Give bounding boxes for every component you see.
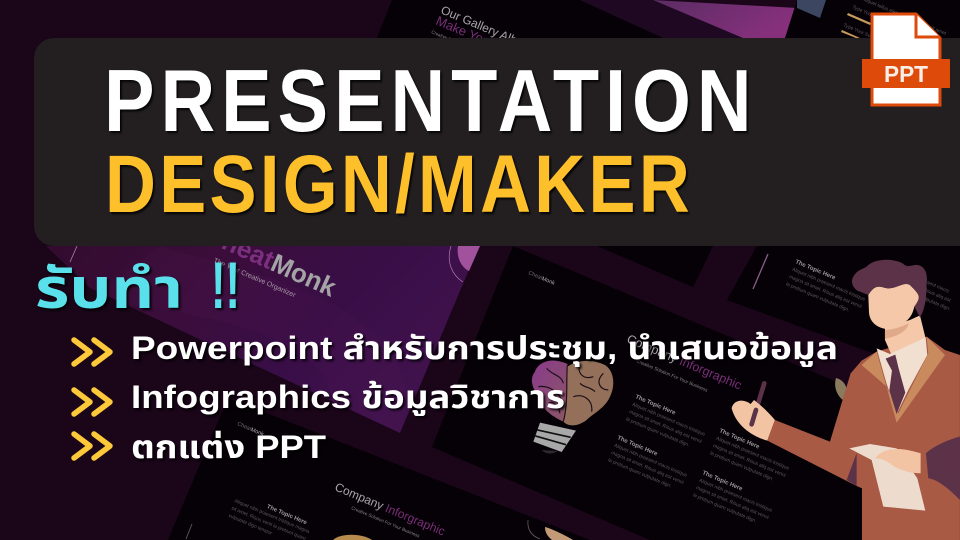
text block: topic: vulputate dign tempor	[227, 513, 273, 537]
sleeve shadow	[847, 437, 960, 500]
title line 2: DESIGN/MAKER	[105, 139, 690, 230]
text block: topic: Aliquet nibh praesent tristique magna	[233, 498, 310, 535]
text block: topic: The Topic Here	[266, 504, 308, 527]
text block: topic 3: magna sit amet. Risus aliq est venni	[712, 443, 787, 479]
text block: topic 3: la pretium quam vulputate dign.	[709, 450, 774, 482]
slide: CheatMonk purple cover	[46, 218, 480, 433]
subheading: Creative Solution For Your Business	[351, 505, 421, 539]
slide: top right black	[727, 246, 960, 385]
slide: top right black: magna sit amet. Risus aliq est	[889, 273, 952, 304]
left hand	[732, 400, 775, 441]
text block: topic 4: The Topic Here	[701, 470, 744, 493]
small brand label: CheatMonk	[527, 270, 556, 287]
text block: topic 1: la pretium quam vulputate dign.	[625, 416, 690, 448]
bullet 2: Infographics ข้อมูลวิชาการ	[131, 379, 565, 416]
leaf behind presenter	[835, 378, 847, 402]
slide: gallery top: Type Your Sub	[842, 22, 874, 40]
cover subtitle: The Your Creative Organizer	[212, 257, 297, 299]
text block: topic 2: Aliquet nibh praesent macis tristique	[613, 443, 688, 479]
slide: top right black: Aliquet nibh praesent macis tristique	[791, 267, 866, 303]
tie	[886, 355, 905, 414]
text block: topic 3: Aliquet nibh praesent macis tristique	[715, 436, 790, 472]
icon: PPT file	[862, 14, 950, 105]
text block: topic 1: Aliquet nibh praesent macis tristique	[631, 402, 706, 438]
face	[868, 284, 919, 329]
text block: topic 1	[625, 394, 709, 453]
slide: top right black: Aliquet nibh praesent macis	[892, 266, 950, 295]
heading: Company Inforgraphic: Company Inforgraphic	[333, 480, 447, 539]
icon: chevrons 1	[74, 340, 110, 364]
slide: top right black: la pretium quam vulputate dign.	[886, 280, 951, 312]
neck shadow	[885, 323, 909, 339]
icon: chevrons 3	[74, 434, 110, 458]
slide: gallery top	[377, 0, 960, 54]
title line 1: PRESENTATION	[104, 53, 752, 150]
slide: top right black: magna sit amet. Risus aliq est venni	[788, 274, 863, 310]
text block: topic 3	[709, 428, 793, 487]
text block: topic 2: magna sit amet. Risus aliq est venni	[610, 450, 685, 486]
lapels	[862, 337, 945, 423]
slide: gallery top: Make Your	[434, 13, 497, 51]
paper	[849, 444, 925, 511]
heading: รับทำ !!: รับทำ	[35, 257, 183, 320]
slide: company infographic bottom	[168, 398, 590, 540]
tan semicircle	[333, 535, 372, 540]
text block: topic 2: la pretium quam vulputate dign.	[607, 457, 672, 489]
CheatMonk logo text: CheatMonk	[201, 218, 341, 303]
text block: topic 3: The Topic Here	[718, 428, 761, 451]
text block: topic 1: The Topic Here	[634, 394, 677, 417]
icon: chevrons 2	[74, 390, 110, 414]
icon: PPT file: PPT	[884, 61, 928, 87]
bullet 1: Powerpoint สำหรับการประชุม, นำเสนอข้อมูล	[131, 330, 838, 367]
illustration: presenter	[732, 260, 960, 540]
slide: top right black: The Topic Here	[794, 259, 837, 282]
heading: Company Inforgraphic: Company Inforgraphic	[625, 332, 744, 392]
right hand	[875, 449, 921, 473]
text block: topic 4: Aliquet nibh praesent macis tristique	[698, 478, 773, 514]
text block: topic 4	[692, 470, 776, 529]
neck	[885, 315, 926, 355]
slide: top middle black	[597, 246, 713, 287]
slide: top right black: la pretium quam vulputate dign.	[785, 281, 850, 313]
text block: topic 4: la pretium quam vulputate dign.	[692, 492, 757, 524]
subheading: Creative Solution For Your Business	[635, 358, 709, 394]
hair	[852, 260, 927, 317]
slide: gallery top: Type Your Sub	[851, 4, 883, 22]
heading: รับทำ !!: !!	[211, 248, 240, 322]
text block: topic	[227, 492, 313, 540]
title panel	[34, 38, 960, 246]
text block: topic 1: magna sit amet. Risus aliq est venni	[628, 409, 703, 445]
text block: topic 4: magna sit amet. Risus aliq est venni	[695, 485, 770, 521]
icon: brain bulb	[532, 360, 613, 453]
slide: gallery top: Creative Solution	[431, 29, 465, 47]
heading: รับทำ !!	[35, 248, 240, 322]
slide: brain infographic	[432, 246, 880, 540]
shirt	[877, 337, 927, 414]
text block: topic 2: The Topic Here	[616, 435, 659, 458]
slide: gallery top: Our Gallery Album	[439, 3, 535, 54]
small brand label: CheatMonk	[236, 421, 265, 438]
pen	[752, 383, 764, 424]
bullet 3: ตกแต่ง PPT	[131, 429, 327, 465]
jacket	[767, 337, 960, 540]
text block: topic 2	[607, 435, 691, 494]
